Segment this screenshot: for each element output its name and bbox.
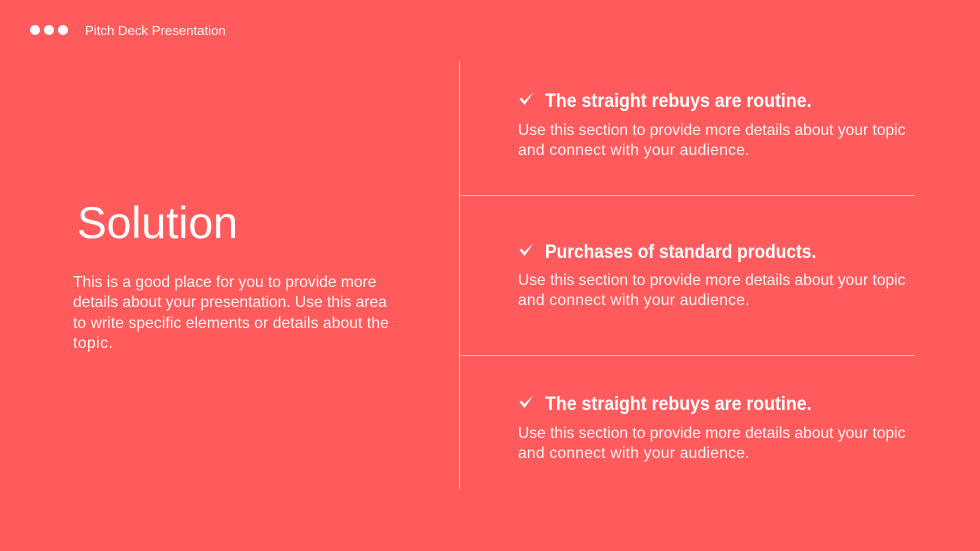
item 1 heading: The straight rebuys are routine. bbox=[545, 90, 812, 112]
item 2 text: and connect with your audience. bbox=[518, 292, 750, 309]
horizontal divider 2 bbox=[460, 355, 915, 356]
item 3 bbox=[518, 393, 905, 462]
item 2 heading: Purchases of standard products. bbox=[545, 241, 816, 263]
icon: check 1 bbox=[520, 92, 534, 105]
item 1 text: Use this section to provide more details about your topic bbox=[518, 122, 905, 139]
item 1 bbox=[518, 90, 905, 159]
intro paragraph bbox=[73, 274, 389, 352]
item 3 text: and connect with your audience. bbox=[518, 445, 750, 462]
title: Solution bbox=[77, 199, 238, 248]
item 2 bbox=[518, 241, 905, 309]
item 1 text: and connect with your audience. bbox=[518, 142, 750, 159]
intro paragraph: details about your presentation. Use this area bbox=[73, 294, 387, 311]
item 3 text: Use this section to provide more details about your topic bbox=[518, 425, 905, 442]
intro paragraph: to write specific elements or details about the bbox=[73, 315, 389, 332]
item 1 text bbox=[518, 122, 905, 159]
icon: check 2 bbox=[520, 243, 534, 256]
horizontal divider 1 bbox=[460, 195, 915, 196]
intro paragraph: This is a good place for you to provide more bbox=[73, 274, 376, 291]
item 3 text bbox=[518, 425, 905, 462]
intro paragraph: topic. bbox=[73, 335, 113, 352]
vertical divider bbox=[459, 61, 460, 490]
item 2 text: Use this section to provide more details about your topic bbox=[518, 272, 905, 289]
header label: Pitch Deck Presentation bbox=[85, 23, 226, 38]
header dots bbox=[30, 25, 68, 35]
item 2 text bbox=[518, 272, 905, 309]
item 3 heading: The straight rebuys are routine. bbox=[545, 393, 812, 415]
icon: check 3 bbox=[520, 395, 534, 408]
